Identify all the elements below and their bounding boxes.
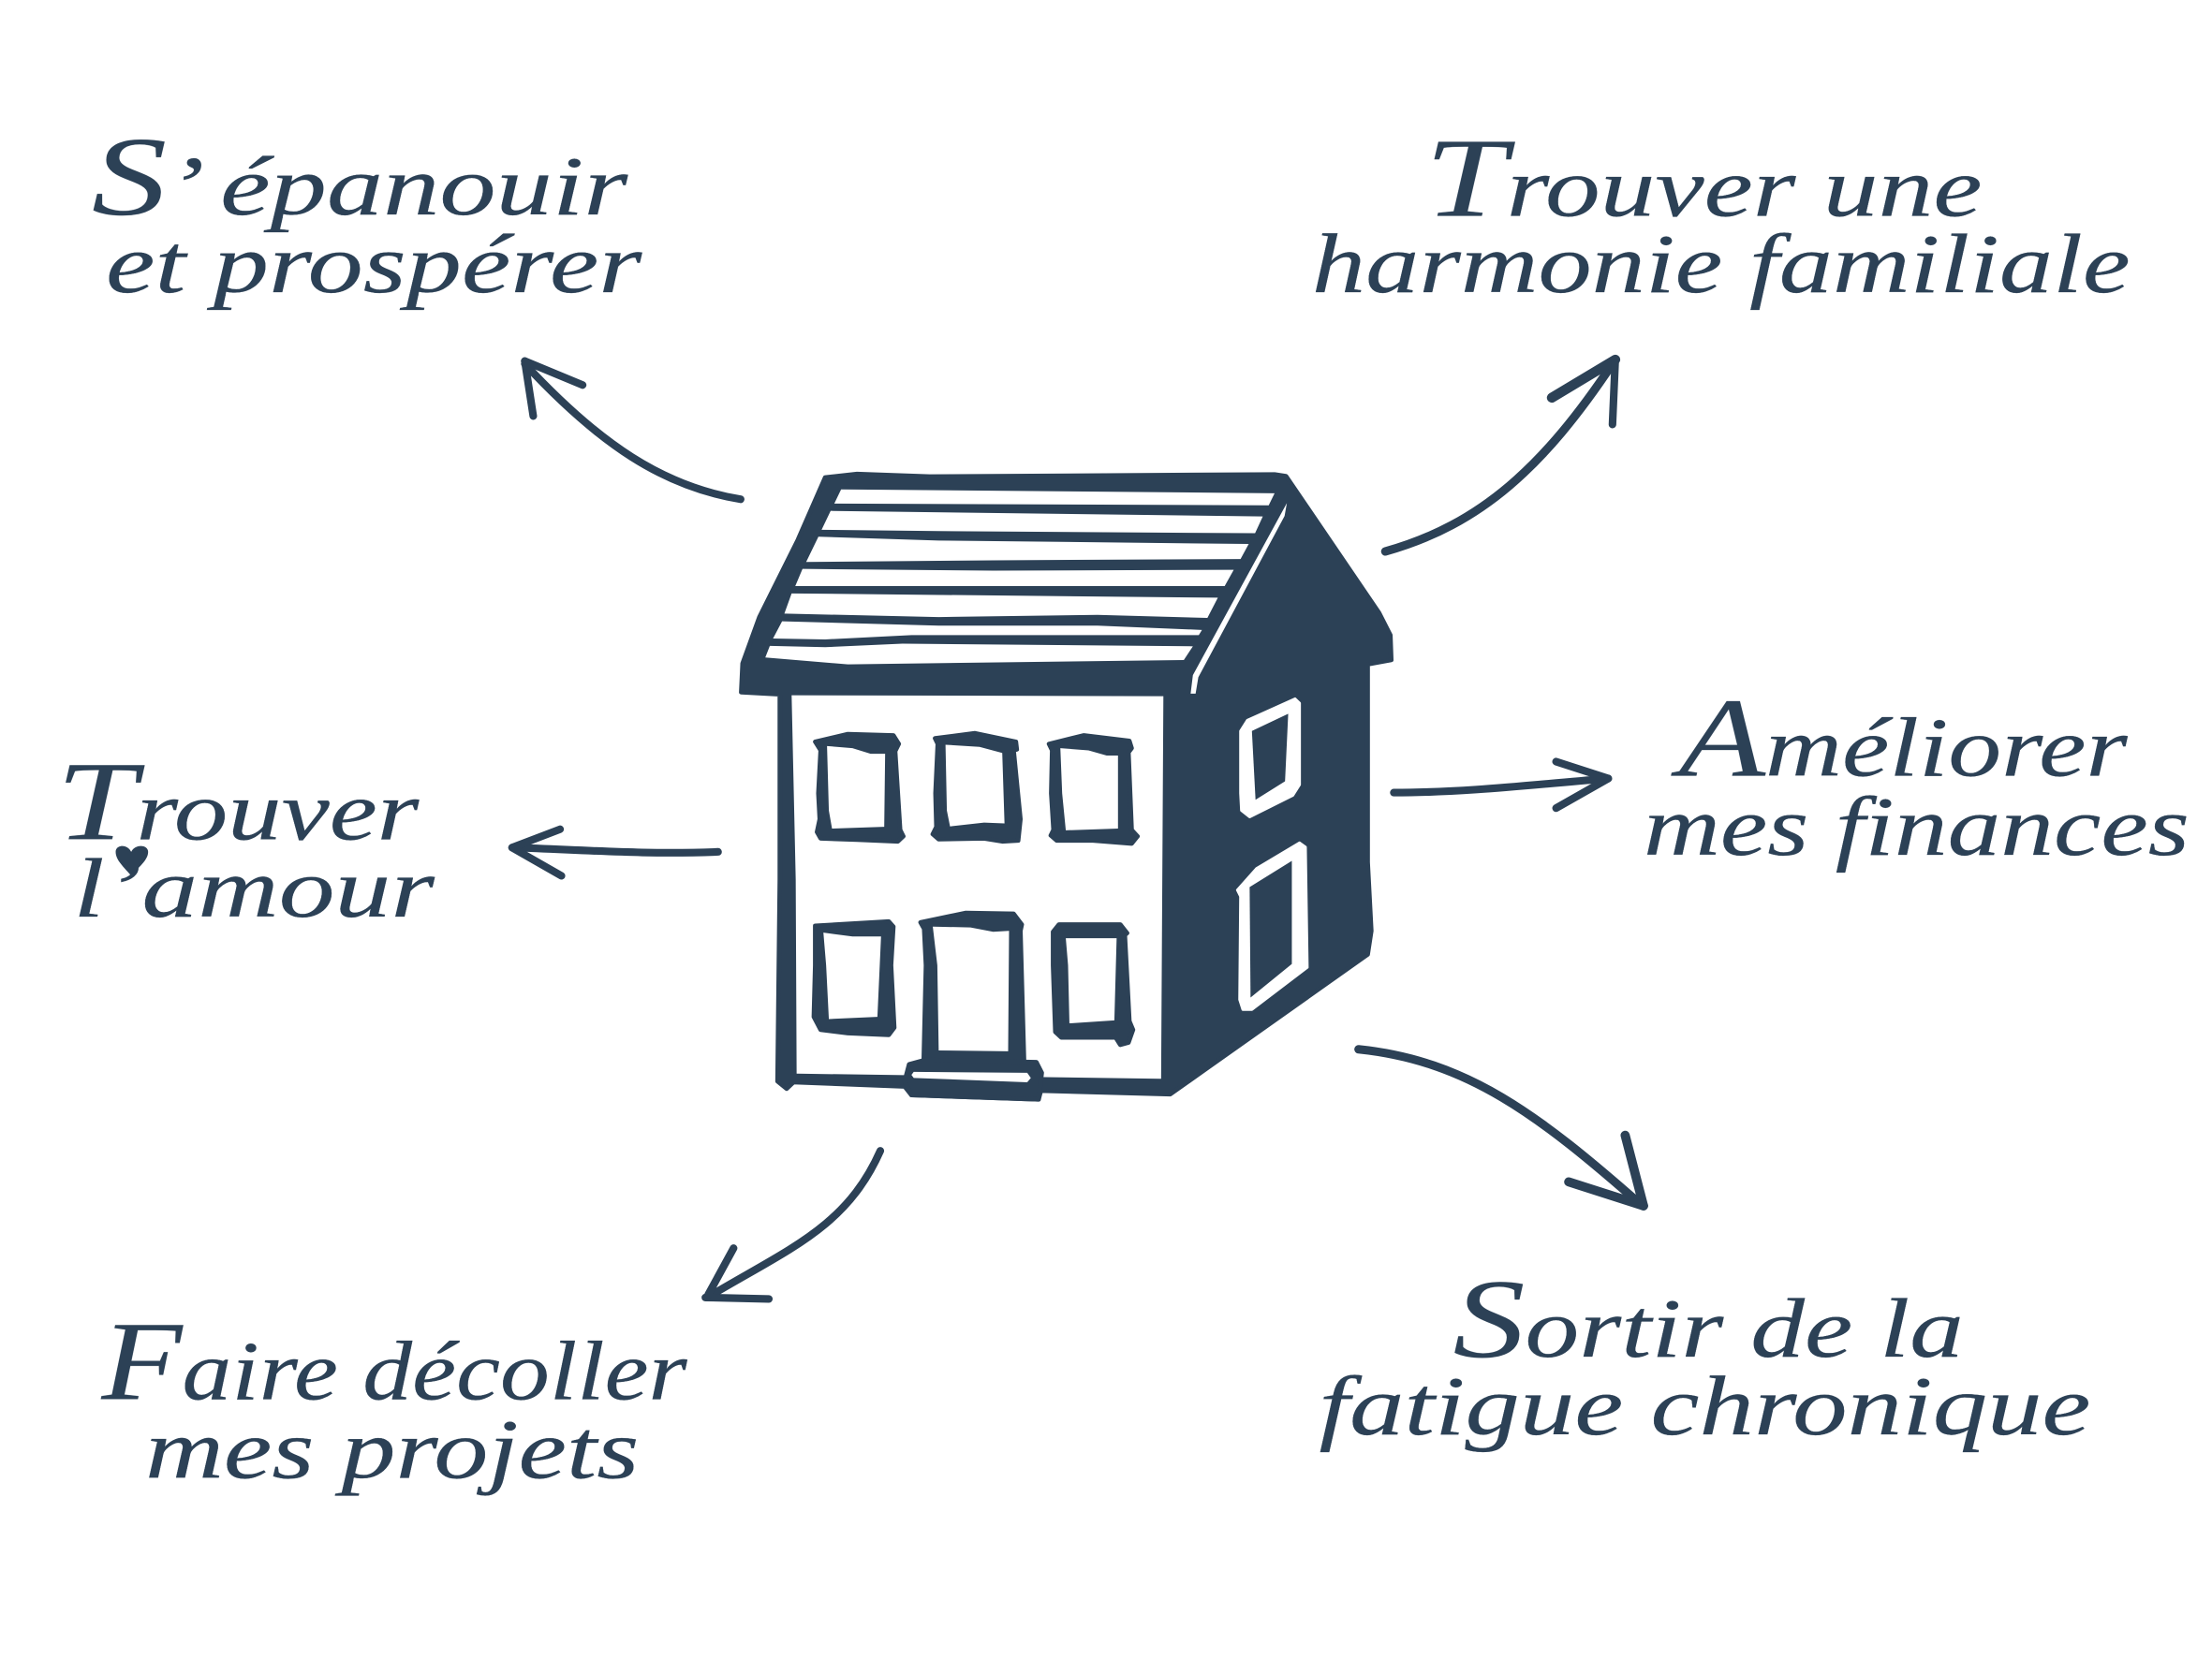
label: sortir de la fatigue chronique: fatigue chronique [1319, 1358, 2090, 1453]
label: sortir de la fatigue chronique: S ortir de la [1453, 1257, 1964, 1382]
label: améliorer mes finances [1644, 677, 2190, 874]
arrow: to harmonie familiale [1385, 360, 1615, 551]
house silhouette [742, 474, 1392, 1099]
side windows [1237, 698, 1307, 1009]
arrow: to amour [512, 830, 718, 875]
icon: heart [116, 846, 148, 875]
front wall [791, 696, 1163, 1079]
label: trouver l'amour [56, 740, 435, 935]
label: faire décoller mes projets [100, 1299, 688, 1497]
label: trouver une harmonie familiale: T rouver une [1424, 116, 1982, 241]
label: améliorer mes finances: A méliorer [1671, 677, 2129, 801]
label: trouver une harmonie familiale: harmonie familiale [1312, 216, 2131, 311]
label: s'épanouir et prospérer: S ’ épanouir [92, 115, 628, 240]
front windows and door [814, 733, 1138, 1099]
label: faire décoller mes projets: mes projets [145, 1402, 639, 1497]
arrow: to projets [705, 1151, 880, 1299]
label: trouver l'amour: T rouver [56, 740, 420, 864]
label: sortir de la fatigue chronique [1319, 1257, 2090, 1453]
label: s'épanouir et prospérer: et prospérer [106, 216, 642, 311]
label: faire décoller mes projets: Faire décoller [100, 1299, 688, 1424]
arrow: to S'épanouir [524, 361, 741, 499]
roof stripes [765, 490, 1287, 694]
icon: house [742, 474, 1392, 1099]
arrow: to fatigue [1359, 1050, 1644, 1206]
label: s'épanouir et prospérer [92, 115, 642, 311]
label: trouver une harmonie familiale [1312, 116, 2131, 311]
arrow: to finances [1394, 761, 1608, 808]
label: trouver l'amour: l’amour [73, 841, 435, 935]
label: améliorer mes finances: mes finances [1644, 779, 2190, 874]
